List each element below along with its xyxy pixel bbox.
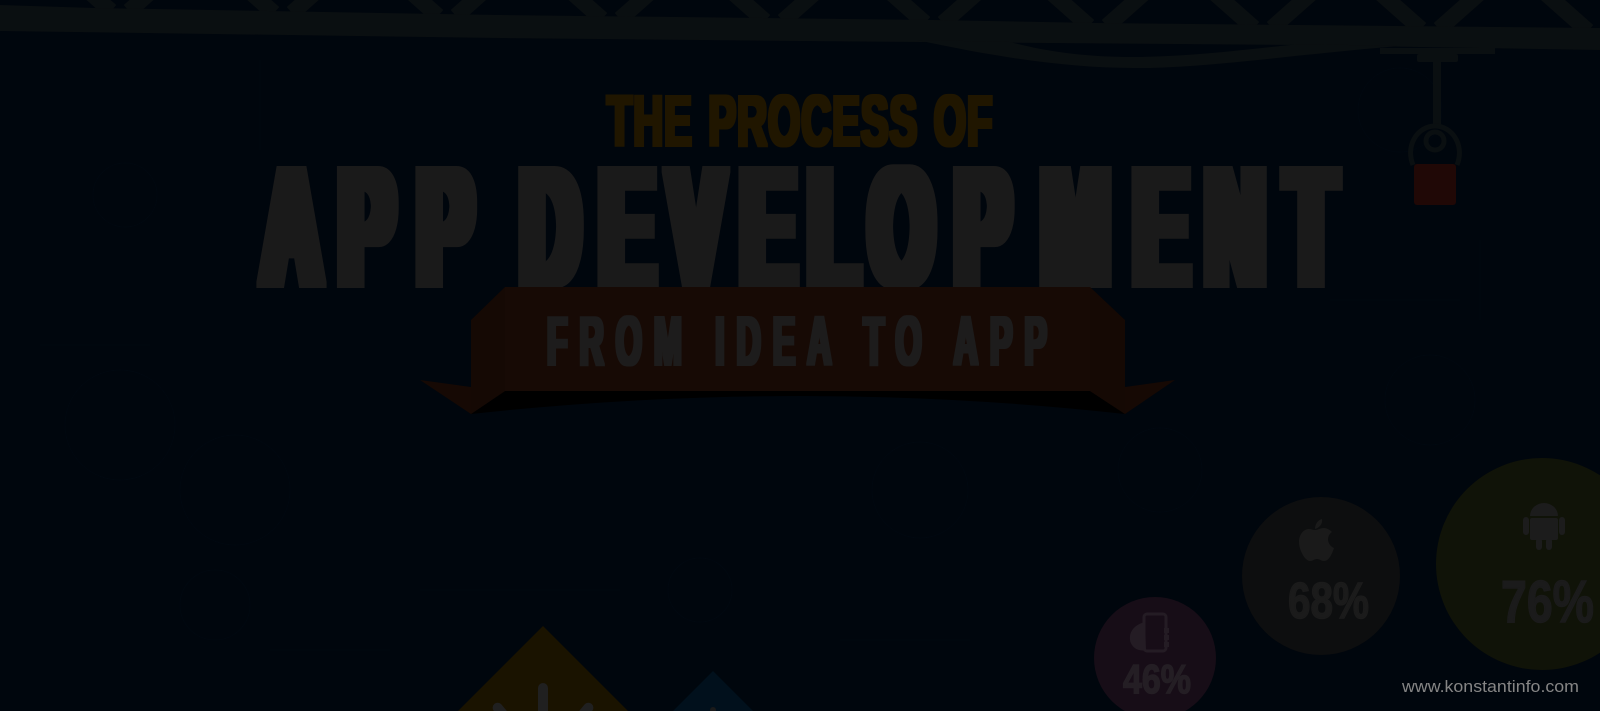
icon: android — [1523, 503, 1565, 550]
banner text: FROM IDEA TO APP — [547, 301, 1059, 380]
label: 46%: 46% — [1123, 656, 1191, 702]
title: app development: APP DEVELOPMENT — [262, 133, 1336, 322]
stat bubble: android 76% — [1436, 458, 1600, 670]
ribbon banner — [420, 287, 1175, 414]
label: 68%: 68% — [1288, 572, 1369, 629]
crane truss — [0, 0, 1600, 68]
title line: the process of: THE PROCESS OF — [607, 82, 994, 161]
icon: apple — [1299, 519, 1334, 561]
stat bubble: mobile 46% — [1094, 597, 1216, 711]
diamond: blue — [673, 671, 753, 711]
crane hook with red block — [1380, 48, 1495, 205]
diamond: yellow idea — [458, 626, 628, 711]
watermark url: www.konstantinfo.com — [1401, 678, 1579, 696]
icon: hand holding phone — [1130, 614, 1169, 651]
stat bubble: apple 68% — [1242, 497, 1400, 655]
